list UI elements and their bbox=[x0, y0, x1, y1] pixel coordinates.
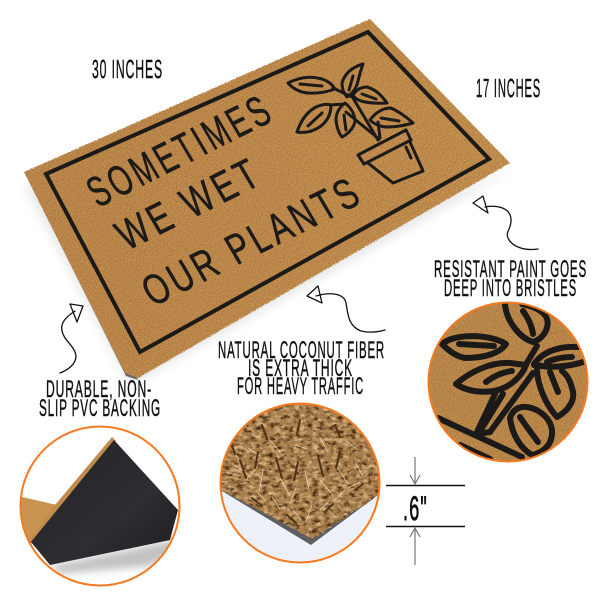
orange ring bbox=[20, 426, 180, 586]
callout: coconut fiber bbox=[218, 337, 385, 400]
callout: coconut fiber: FOR HEAVY TRAFFIC bbox=[237, 373, 364, 400]
callout line 2: IS EXTRA THICK bbox=[248, 355, 353, 382]
circle: backing detail bbox=[18, 426, 182, 586]
mat surface bbox=[24, 19, 510, 378]
arrow: to mat backing bbox=[60, 304, 83, 373]
potted plant illustration bbox=[288, 64, 423, 183]
grey rubber base bbox=[222, 490, 378, 545]
doormat bbox=[24, 19, 512, 386]
black pvc backing bbox=[31, 440, 178, 565]
text: 30 INCHES bbox=[92, 54, 163, 84]
bottom dimension line bbox=[386, 526, 465, 528]
callout: resistant paint bbox=[434, 256, 587, 302]
top leaf bbox=[505, 304, 548, 342]
thickness dimension bbox=[386, 457, 465, 565]
tan flap edge bbox=[29, 437, 116, 544]
circle: coconut fiber detail bbox=[214, 398, 386, 563]
leaves bbox=[288, 77, 335, 93]
thickness value: .6" bbox=[403, 490, 428, 528]
tan mat flat bbox=[22, 497, 56, 543]
left leaf bbox=[442, 336, 506, 358]
pale photo background bbox=[222, 491, 378, 562]
mat slogan bbox=[78, 85, 371, 316]
bottom arrow bbox=[410, 528, 420, 565]
slogan line 1: SOMETIMES bbox=[78, 85, 282, 217]
pot rim lines bbox=[438, 418, 522, 459]
orange ring bbox=[220, 404, 380, 562]
stems bbox=[477, 346, 537, 432]
slogan line 3: OUR PLANTS bbox=[133, 167, 371, 316]
arrow: to mat fibers bbox=[307, 286, 385, 332]
right horizontal leaf bbox=[534, 347, 583, 367]
text: SLIP PVC BACKING bbox=[39, 395, 161, 422]
callout: pvc backing bbox=[39, 376, 161, 422]
orange ring bbox=[428, 302, 588, 462]
light fibre strands bbox=[226, 438, 363, 521]
mat shadow bbox=[24, 170, 512, 386]
callout line 1: DURABLE, NON- bbox=[46, 376, 152, 403]
enlarged plant print bbox=[438, 304, 583, 459]
coir background bbox=[426, 300, 590, 464]
white photo background bbox=[20, 426, 180, 586]
lower leaf bbox=[510, 407, 552, 455]
text: NATURAL COCONUT FIBER bbox=[218, 337, 385, 364]
right lower leaf bbox=[537, 368, 573, 417]
printed border bbox=[46, 32, 489, 352]
slogan line 2: WE WET bbox=[107, 148, 271, 260]
dark fibre gaps bbox=[230, 420, 363, 523]
coir fibres bbox=[222, 404, 378, 538]
stems bbox=[330, 88, 380, 140]
shadow below flap bbox=[50, 541, 182, 574]
top arrow bbox=[410, 457, 420, 484]
top dimension line bbox=[386, 484, 465, 486]
centre leaf bbox=[456, 363, 526, 392]
mat side edge bbox=[26, 172, 138, 380]
circle: paint detail bbox=[426, 300, 590, 464]
arrow: to mat right corner bbox=[473, 196, 538, 250]
pot bbox=[358, 130, 423, 183]
